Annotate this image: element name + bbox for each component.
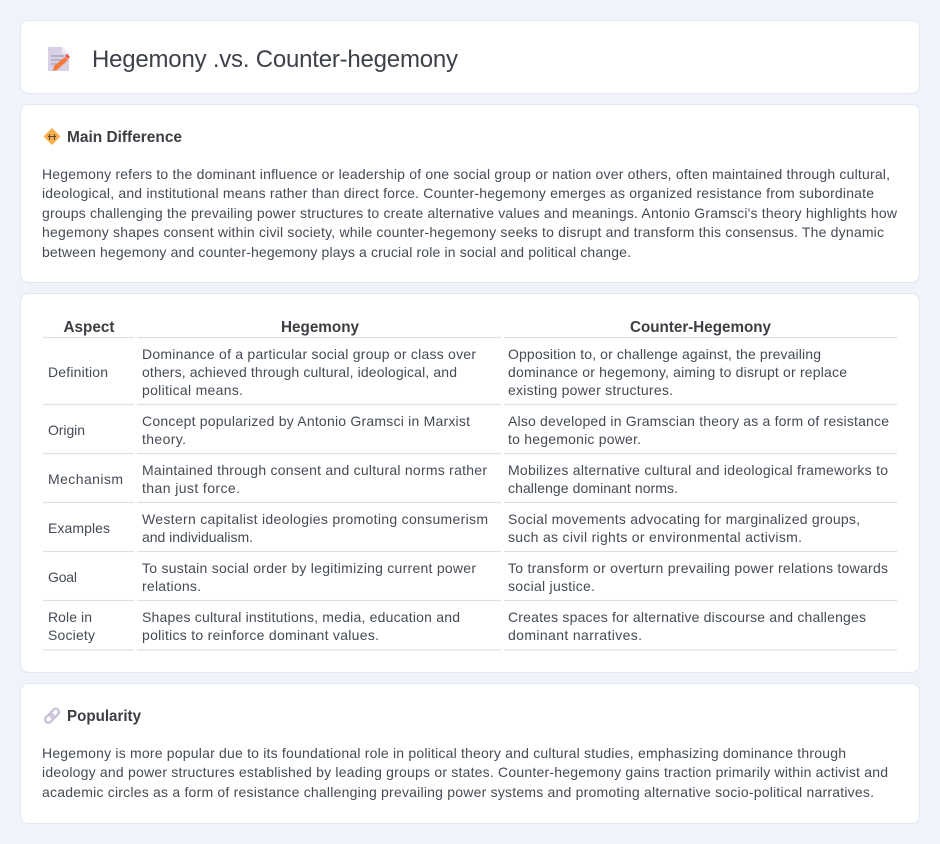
row: mechanism: Mechanism <box>48 471 123 487</box>
row: goal: social justice. <box>508 578 595 594</box>
row: definition: Opposition to, or challenge against, the prevailing <box>508 346 821 362</box>
row: goal: Goal <box>48 569 77 585</box>
row: definition <box>43 346 897 404</box>
row: role in society: politics to reinforce dominant values. <box>142 627 379 643</box>
row: mechanism: than just force. <box>142 480 240 496</box>
text: popularity paragraph: Hegemony is more popular due to its foundational role in political theory and cultural studies, emphasizing dominance through <box>42 745 846 761</box>
icon: chain link <box>44 707 60 724</box>
icon: document with pencil <box>48 47 70 71</box>
row: examples: and individualism. <box>142 529 253 545</box>
text: main difference paragraph: hegemony shapes consent within civil society, while counter-hegemony seeks to disrupt and transform this consensus. The dynamic <box>42 224 884 240</box>
row: examples: such as civil rights or environmental activism. <box>508 529 802 545</box>
panel: comparison table <box>20 294 920 672</box>
row: goal: To sustain social order by legitimizing current power <box>142 560 476 576</box>
table header: Counter-Hegemony <box>630 319 771 336</box>
table header: Aspect <box>64 319 115 336</box>
row: examples: Western capitalist ideologies promoting consumerism <box>142 511 488 527</box>
text: main difference paragraph: between hegemony and counter-hegemony plays a crucial role in social and political change. <box>42 244 631 260</box>
row: origin: Also developed in Gramscian theory as a form of resistance <box>508 413 889 429</box>
text: main difference paragraph: groups challenging the prevailing power structures to create alternative values and meanings. Antonio Gramsci's theory highlights how <box>42 205 898 221</box>
heading: main difference: Main Difference <box>67 129 182 146</box>
panel: popularity <box>20 684 920 824</box>
panel: title header <box>20 20 920 94</box>
row: examples: Social movements advocating for marginalized groups, <box>508 511 860 527</box>
row: role in society: Shapes cultural institutions, media, education and <box>142 609 460 625</box>
row: examples <box>43 511 897 552</box>
row: mechanism: challenge dominant norms. <box>508 480 678 496</box>
row: goal: To transform or overturn prevailing power relations towards <box>508 560 888 576</box>
row: origin <box>43 413 897 454</box>
title: Hegemony .vs. Counter-hegemony <box>92 46 458 73</box>
table header: Hegemony <box>281 319 359 336</box>
row: role in society: Creates spaces for alternative discourse and challenges <box>508 609 866 625</box>
heading: popularity: Popularity <box>67 708 141 725</box>
row: goal: relations. <box>142 578 201 594</box>
row: role in society <box>43 609 897 650</box>
text: main difference paragraph: Hegemony refers to the dominant influence or leadership of one social group or nation over others, often maintained through cultural, <box>42 166 890 182</box>
row: examples: Examples <box>48 520 110 536</box>
row: mechanism <box>43 462 897 502</box>
row: definition: existing power structures. <box>508 382 673 398</box>
row: definition: dominance or hegemony, aiming to disrupt or replace <box>508 364 847 380</box>
row: definition: others, achieved through cultural, ideological, and <box>142 364 457 380</box>
row: origin: Concept popularized by Antonio Gramsci in Marxist <box>142 413 470 429</box>
row: definition: political means. <box>142 382 243 398</box>
table header <box>43 319 897 338</box>
text: popularity paragraph <box>42 745 888 800</box>
row: origin: Origin <box>48 422 85 438</box>
row: mechanism: Maintained through consent and cultural norms rather <box>142 462 487 478</box>
row: role in society: Society <box>48 627 95 643</box>
row: origin: to hegemonic power. <box>508 431 641 447</box>
row: goal <box>43 560 897 600</box>
row: origin: theory. <box>142 431 186 447</box>
text: main difference paragraph <box>42 166 898 260</box>
icon: warning diamond <box>44 128 60 145</box>
text: popularity paragraph: ideology and power structures established by leading groups or states. Counter-hegemony gains traction primarily within activist and <box>42 764 888 780</box>
text: main difference paragraph: ideological, and institutional means rather than direct force. Counter-hegemony emerges as organized resistance from subordinate <box>42 185 874 201</box>
row: role in society: Role in <box>48 609 92 625</box>
row: definition: Dominance of a particular social group or class over <box>142 346 476 362</box>
panel: main difference <box>20 104 920 282</box>
row: definition: Definition <box>48 364 108 380</box>
text: popularity paragraph: academic circles as a form of resistance challenging prevailing power systems and promoting alternative socio-political narratives. <box>42 784 874 800</box>
row: role in society: dominant narratives. <box>508 627 642 643</box>
row: mechanism: Mobilizes alternative cultural and ideological frameworks to <box>508 462 888 478</box>
